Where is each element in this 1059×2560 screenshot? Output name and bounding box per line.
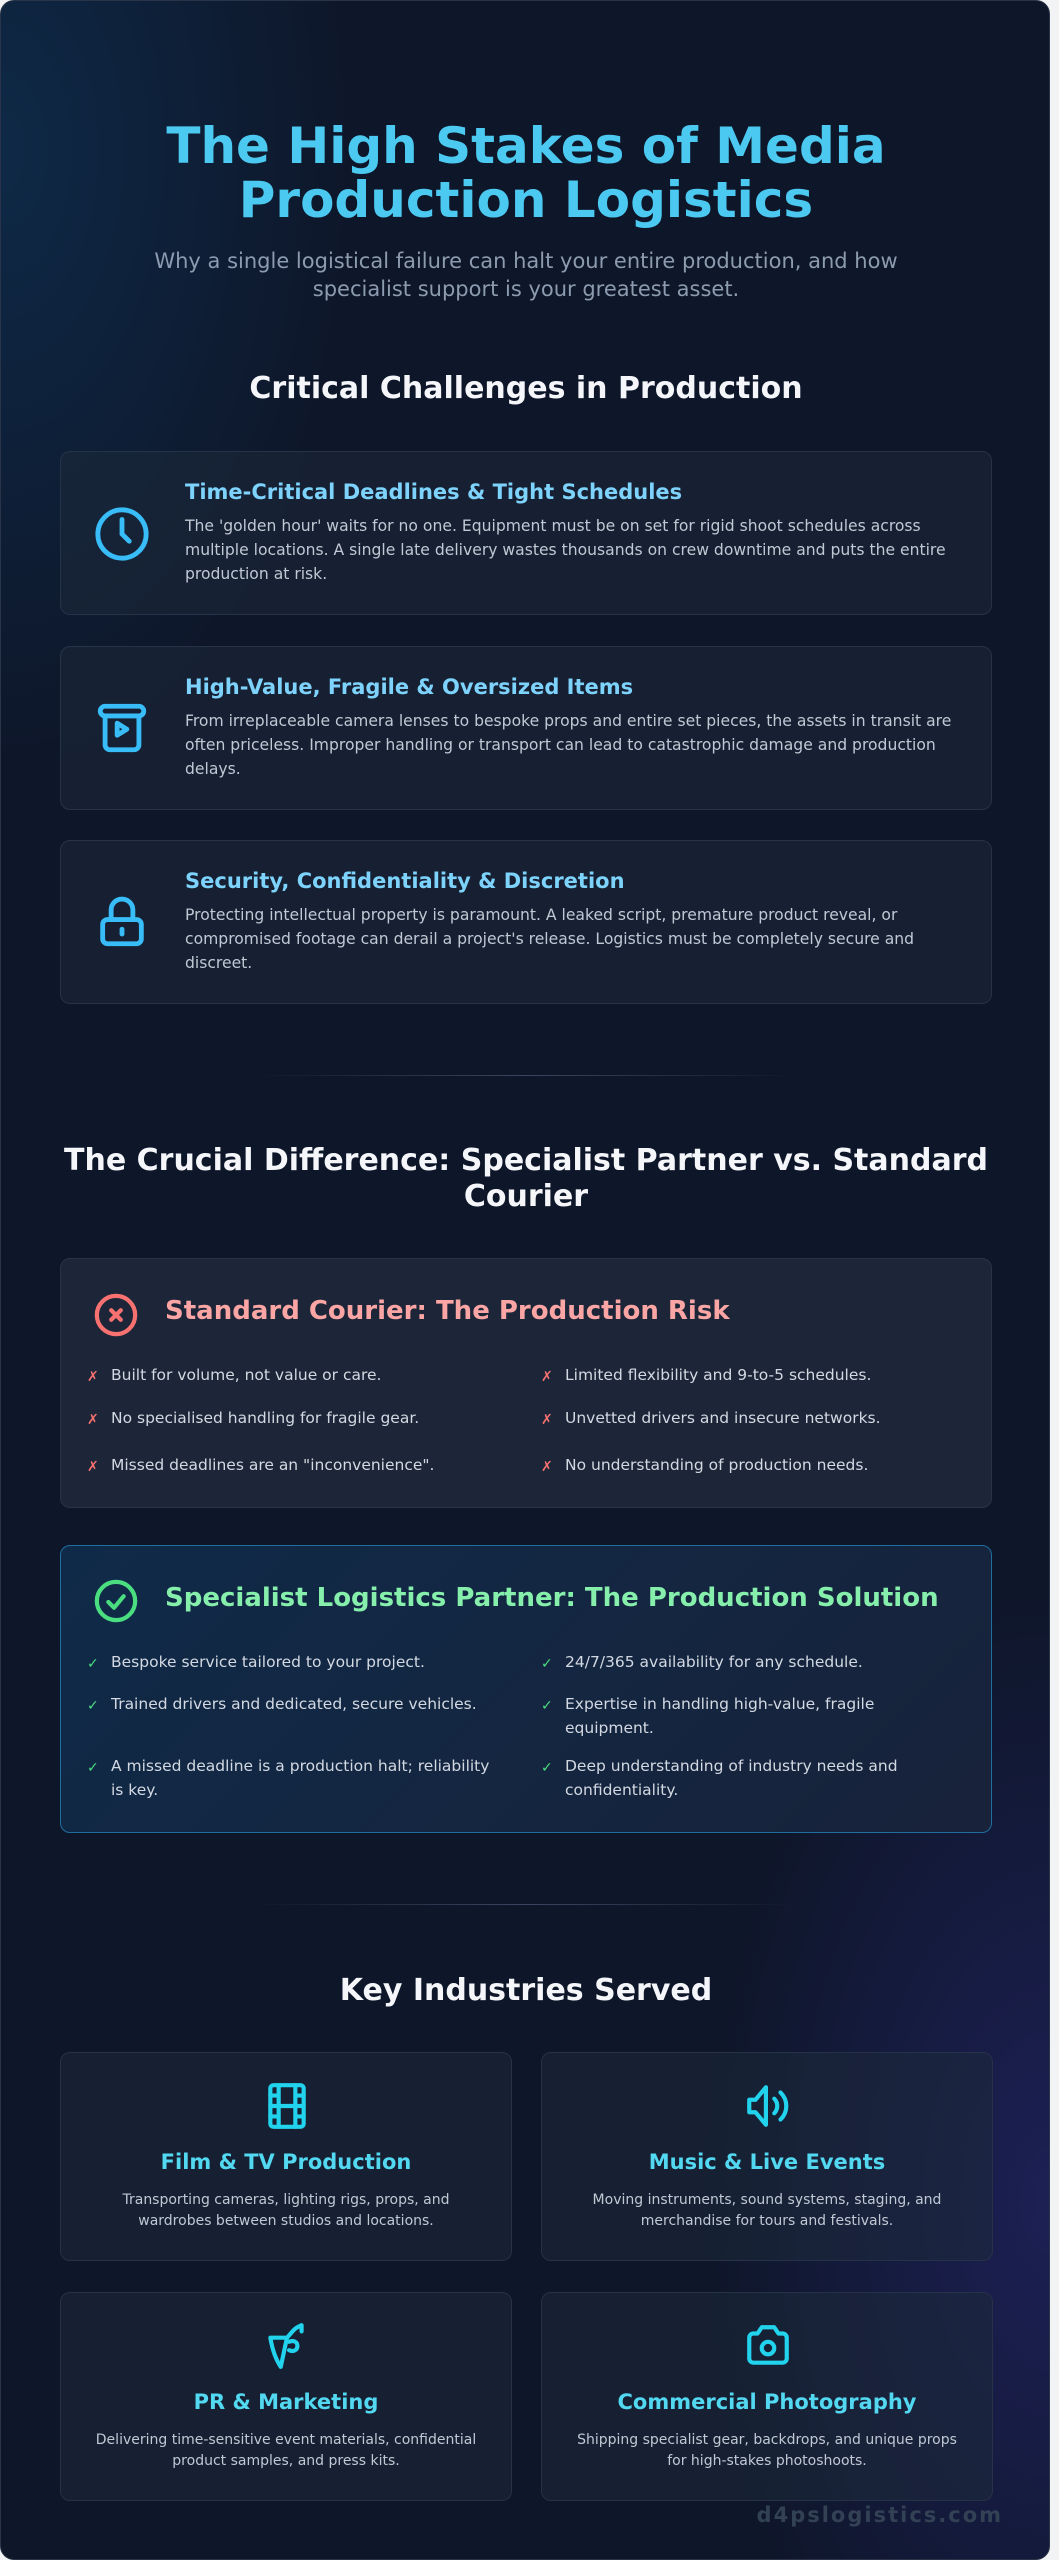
icon: lock — [100, 896, 144, 946]
panel: standard courier: No specialised handling for fragile gear. — [111, 1409, 419, 1427]
panel: time-critical — [60, 451, 992, 615]
panel: standard courier: Unvetted drivers and insecure networks. — [565, 1409, 881, 1427]
panel: security — [60, 840, 992, 1004]
panel: photography — [541, 2292, 993, 2501]
panel: standard courier: ✗ — [87, 1369, 99, 1385]
text: From irreplaceable camera lenses to bespoke props and entire set pieces, the assets in transit are often priceless. Improper handling or transport can lead to catastrophic damage and production delays. — [185, 712, 951, 778]
icon: archive box — [98, 704, 146, 752]
text: Shipping specialist gear, backdrops, and unique props for high-stakes photoshoots. — [577, 2432, 957, 2469]
panel: specialist partner: Trained drivers and dedicated, secure vehicles. — [111, 1695, 477, 1713]
icon: megaphone — [268, 2323, 304, 2369]
panel: standard courier: ✗ — [87, 1459, 99, 1475]
icon: camera — [747, 2325, 789, 2365]
panel: standard courier: ✗ — [87, 1412, 99, 1428]
list: Bespoke service tailored to your project. — [111, 1653, 425, 1671]
panel: standard courier — [60, 1258, 992, 1508]
icon: film — [268, 2083, 306, 2129]
heading: critical challenges: Critical Challenges in Production — [249, 371, 803, 406]
watermark: d4pslogistics.com — [757, 2503, 1003, 2527]
heading: key industries: Key Industries Served — [340, 1973, 712, 2008]
panel: film & tv — [60, 2052, 512, 2261]
heading: Commercial Photography — [618, 2390, 916, 2414]
panel: standard courier: No understanding of production needs. — [565, 1456, 868, 1474]
panel: specialist partner: ✓ — [87, 1656, 99, 1672]
heading: High-Value, Fragile & Oversized Items — [185, 675, 633, 699]
icon: x circle — [94, 1294, 138, 1336]
heading: crucial difference: The Crucial Difference: Specialist Partner vs. Standard — [64, 1143, 988, 1178]
panel: high-value — [60, 646, 992, 810]
text: Protecting intellectual property is paramount. A leaked script, premature product reveal, or compromised footage can derail a project's release. Logistics must be completely secure and discreet. — [185, 906, 914, 972]
heading: crucial difference — [64, 1143, 988, 1214]
panel: specialist partner: ✓ — [87, 1760, 99, 1776]
title: Production Logistics — [239, 171, 813, 229]
heading: Time-Critical Deadlines & Tight Schedules — [185, 480, 682, 504]
panel: specialist partner: Expertise in handling high-value, fragile equipment. — [565, 1695, 874, 1737]
panel: standard courier: Limited flexibility and 9-to-5 schedules. — [565, 1366, 871, 1384]
text: Moving instruments, sound systems, staging, and merchandise for tours and festivals. — [593, 2192, 941, 2229]
panel: specialist partner: ✓ — [541, 1698, 553, 1714]
text: Transporting cameras, lighting rigs, props, and wardrobes between studios and locations. — [122, 2192, 450, 2229]
heading: PR & Marketing — [194, 2390, 378, 2414]
panel: standard courier: Missed deadlines are an "inconvenience". — [111, 1456, 434, 1474]
heading: Film & TV Production — [161, 2150, 411, 2174]
heading: Specialist Logistics Partner: The Production Solution — [165, 1583, 939, 1613]
panel: specialist partner: ✓ — [541, 1656, 553, 1672]
icon: clock — [95, 507, 149, 561]
subtitle — [154, 249, 898, 301]
panel: specialist partner: Deep understanding of industry needs and confidentiality. — [565, 1757, 898, 1799]
heading: Music & Live Events — [649, 2150, 885, 2174]
text: The 'golden hour' waits for no one. Equipment must be on set for rigid shoot schedules across multiple locations. A single late delivery wastes thousands on crew downtime and puts the entire production at risk. — [185, 517, 946, 583]
panel: specialist partner: ✓ — [541, 1760, 553, 1776]
heading: crucial difference: Courier — [464, 1179, 588, 1214]
panel: specialist partner — [60, 1545, 992, 1833]
subtitle: specialist support is your greatest asset. — [313, 277, 739, 301]
panel: specialist partner: ✓ — [87, 1698, 99, 1714]
title: The High Stakes of Media — [166, 117, 886, 175]
panel: music — [541, 2052, 993, 2261]
heading: Security, Confidentiality & Discretion — [185, 869, 625, 893]
panel: pr & marketing — [60, 2292, 512, 2501]
text: Delivering time-sensitive event materials, confidential product samples, and press kits. — [96, 2432, 476, 2469]
panel: standard courier: ✗ — [541, 1412, 553, 1428]
panel: standard courier: ✗ — [541, 1369, 553, 1385]
icon: speaker — [747, 2085, 788, 2127]
heading: Standard Courier: The Production Risk — [165, 1296, 730, 1326]
panel: specialist partner: 24/7/365 availability for any schedule. — [565, 1653, 863, 1671]
subtitle: Why a single logistical failure can halt your entire production, and how — [154, 249, 898, 273]
list: Built for volume, not value or care. — [111, 1366, 381, 1384]
panel: standard courier: ✗ — [541, 1459, 553, 1475]
title — [166, 117, 886, 229]
panel: specialist partner: A missed deadline is a production halt; reliability is key. — [111, 1757, 489, 1799]
icon: check circle — [94, 1580, 138, 1622]
